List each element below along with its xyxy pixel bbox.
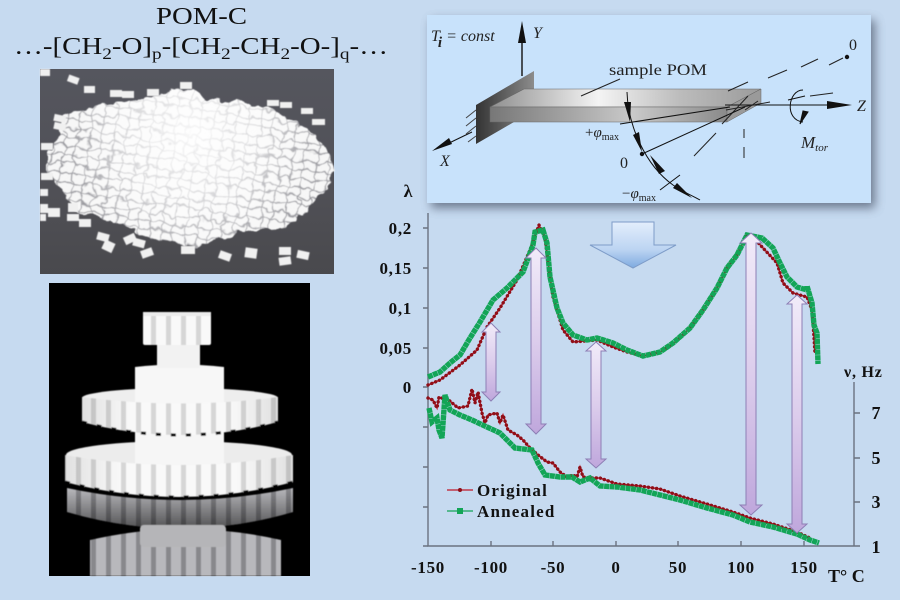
chemical formula: p: [152, 46, 162, 63]
y axis labels: [379, 219, 412, 397]
lambda label: λ: [404, 181, 413, 201]
annealed damping curve: [428, 230, 818, 377]
middle gear teeth: [82, 397, 278, 435]
upper hub: [135, 364, 224, 410]
legend: Original: [477, 481, 548, 500]
y axis labels: 0,2: [389, 219, 412, 238]
chemical formula: -O]: [112, 34, 152, 60]
y axis labels: 0: [403, 378, 412, 397]
right axis title: ν, Hz: [843, 364, 883, 381]
chemical formula: -…: [349, 34, 388, 60]
x axis labels: 100: [727, 558, 755, 577]
M_tor label: tor: [815, 142, 829, 154]
Y label: Y: [533, 25, 544, 42]
sample label: sample POM: [609, 62, 707, 79]
original damping curve: [428, 225, 815, 385]
title: POM-C: POM-C: [156, 4, 247, 30]
right axis labels: 1: [872, 537, 880, 557]
chemical formula: -O-]: [290, 34, 340, 60]
x axis labels: -50: [541, 558, 565, 577]
X axis: [432, 132, 472, 151]
original frequency curve: [428, 389, 810, 538]
lower hub: [135, 430, 224, 466]
angle arc with arrows: [624, 92, 700, 200]
y axis labels: 0,15: [379, 259, 412, 278]
middle gear top face: [82, 388, 278, 408]
x axis labels: 0: [611, 558, 621, 577]
plus phi max label: max: [602, 132, 619, 143]
T_i = const label: i: [438, 35, 443, 51]
chemical formula: -CH: [231, 34, 280, 60]
torsion arrow: [788, 90, 808, 124]
x axis title: T° C: [828, 566, 865, 586]
y axis labels: 0,05: [379, 339, 412, 358]
chemical formula: q: [340, 46, 349, 63]
x axis labels: -150: [411, 558, 445, 577]
minus phi max label: max: [639, 193, 656, 204]
X label: X: [439, 153, 451, 170]
photo: white POM gears on black: [49, 283, 310, 576]
x axis labels: -100: [474, 558, 508, 577]
arrow: 107: [740, 233, 762, 515]
Z label: Z: [857, 98, 867, 115]
x axis labels: 50: [669, 558, 687, 577]
transition arrows: [482, 233, 807, 533]
minus phi max label: −φ: [622, 186, 639, 202]
plus phi max label: +φ: [585, 125, 602, 141]
arrow: 143: [787, 295, 807, 533]
big gear teeth: [65, 455, 293, 497]
shaft: [157, 340, 200, 368]
chemical formula: 2: [102, 46, 112, 63]
chemical formula: 2: [280, 46, 290, 63]
chemical formula: -[CH: [162, 34, 221, 60]
clamp wall: [466, 71, 534, 144]
arrow: -65: [526, 248, 546, 434]
right axis labels: 3: [872, 492, 880, 512]
T_i = const label: = const: [442, 28, 495, 45]
arrow: -100: [482, 323, 500, 401]
x axis labels: [411, 558, 818, 577]
legend: [447, 481, 556, 521]
right axis labels: 5: [872, 448, 880, 468]
angle lines: [620, 107, 745, 154]
icon: big blue down arrow: [590, 222, 676, 268]
zero mark top right: [845, 37, 857, 59]
chemical formula: 2: [221, 46, 231, 63]
chemical formula: …-[CH: [14, 34, 87, 60]
reflection of gears: [67, 488, 293, 576]
T_i = const label: T: [431, 28, 440, 45]
leader line: [581, 79, 620, 96]
photo: white POM pellets: [40, 69, 334, 274]
y axis labels: 0,1: [389, 299, 412, 318]
sample beam: [490, 89, 761, 122]
zero label: 0: [620, 155, 628, 172]
zero mark top right: 0: [849, 37, 857, 54]
annealed frequency curve: [429, 395, 819, 543]
Z axis: [725, 101, 852, 109]
big gear top face: [66, 441, 292, 469]
right axis labels: 7: [872, 403, 880, 423]
top gear: [143, 312, 211, 345]
chart: loss and frequency vs temperature: [379, 181, 883, 586]
Y axis: [518, 21, 526, 76]
arrow: -15: [586, 342, 606, 468]
x axis labels: 150: [790, 558, 818, 577]
M_tor label: M: [801, 133, 815, 152]
dashed reference lines: [694, 58, 843, 158]
panel: torsion pendulum diagram: [427, 15, 875, 208]
right axis labels: [872, 403, 880, 557]
axes: [423, 213, 860, 546]
legend: Annealed: [477, 502, 556, 521]
